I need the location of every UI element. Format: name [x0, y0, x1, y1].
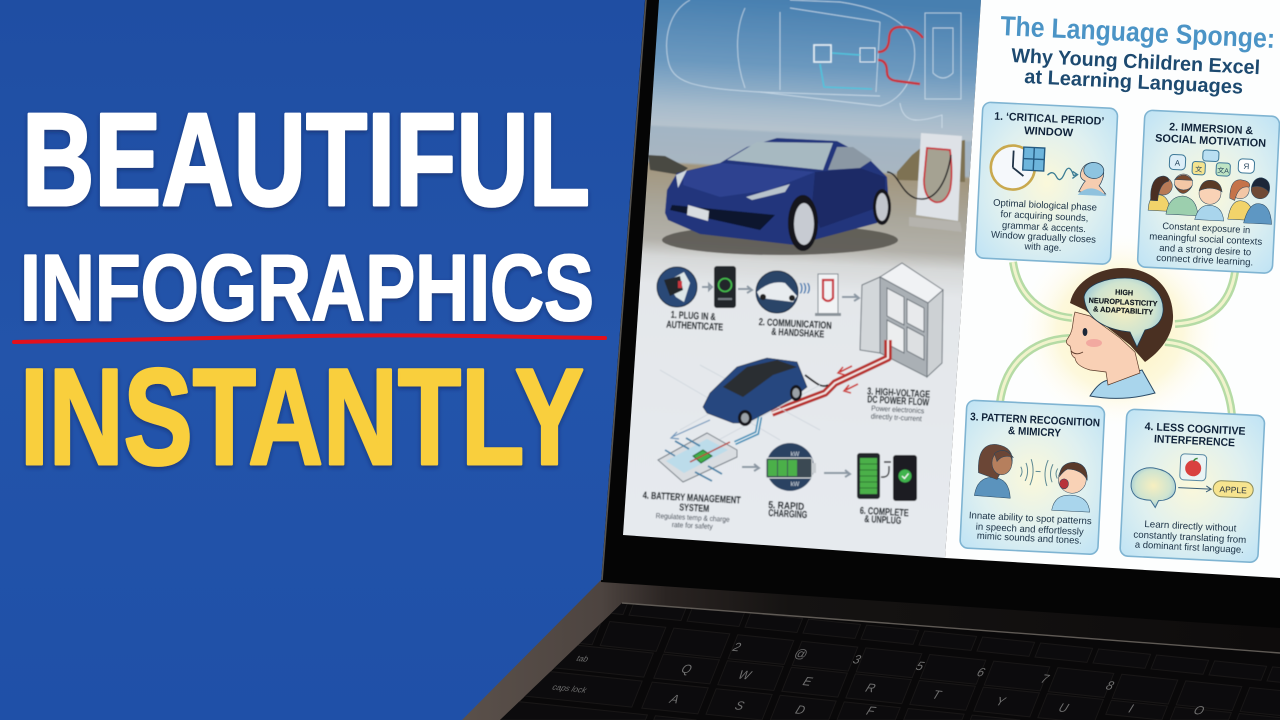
direction arrow: [671, 420, 710, 439]
card 1: critical period window: [975, 102, 1118, 264]
card 2 body text: Constant exposure in: [1162, 221, 1250, 236]
charger red U: [924, 148, 952, 202]
iso car glass roof: [723, 360, 797, 397]
power cable to car: [805, 375, 828, 386]
boy smile: [1071, 351, 1083, 354]
icon: clock: [990, 144, 1036, 191]
keyboard: 5: [914, 659, 926, 673]
card 1 body text: with age.: [1023, 241, 1062, 254]
step 4 icon: battery pack: [658, 433, 737, 482]
step 1 label: [666, 310, 724, 334]
boy cheek: [1086, 339, 1102, 347]
icon: speech bubbles: Я: [1243, 162, 1250, 171]
panel: The Language Sponge infographic: [945, 0, 1280, 578]
car left headlight: [676, 170, 687, 188]
icon: mother speaking: [974, 444, 1014, 498]
arrow: [742, 464, 759, 471]
right hill: [897, 140, 965, 182]
step 4 label: SYSTEM: [679, 502, 709, 515]
card 1 body text: grammar & accents.: [1002, 220, 1086, 235]
keyboard: tab: [575, 653, 590, 664]
card 2 body text: meaningful social contexts: [1149, 231, 1263, 248]
card 2 heading: SOCIAL MOTIVATION: [1155, 133, 1266, 150]
front wheel: [788, 195, 818, 251]
step 2 icon: car circle: [756, 271, 798, 313]
keyboard: esc: [528, 591, 552, 607]
icon: speech bubbles: 文: [1195, 165, 1202, 174]
step 3: high-voltage DC lines: [772, 340, 888, 413]
card 4 body text: a dominant first language.: [1135, 540, 1244, 556]
card 4 body text: constantly translating from: [1133, 529, 1246, 546]
step 2 icon: charger: [815, 274, 841, 316]
headline word: INFOGRAPHICS: INFOGRAPHICS: [20, 235, 594, 340]
brain: NEUROPLASTICITY: [1088, 296, 1158, 308]
central glow: [1015, 230, 1225, 430]
keyboard top edge highlight: [622, 603, 1280, 653]
step 5 icon: rapid charging battery: kW: [791, 452, 800, 458]
step 6 icon: check phone: [893, 455, 917, 501]
card 2 body text: [1148, 220, 1263, 269]
white page: [945, 0, 1280, 578]
card 3: pattern recognition and mimicry: [960, 400, 1105, 555]
brain: & ADAPTABILITY: [1093, 304, 1153, 317]
panel: EV charging infographic: [623, 0, 981, 558]
boy face: [1066, 312, 1140, 385]
step 6 label: 6. COMPLETE: [859, 506, 909, 519]
car body: [665, 138, 889, 245]
keyboard: 6: [975, 665, 987, 679]
keyboard: Q: [679, 662, 694, 676]
card 4 heading: [1144, 421, 1246, 450]
card 3 body text: mimic sounds and tones.: [977, 531, 1082, 547]
cable between phones: [881, 462, 891, 477]
icon: wavy arrow: [1047, 167, 1078, 180]
step 3 label: directly tr-current: [871, 412, 923, 423]
card 2 heading: [1155, 121, 1267, 150]
car side windows: [828, 147, 872, 170]
step 5 label: CHARGING: [768, 508, 808, 521]
bezel edge highlight: [602, 0, 646, 580]
step 1 icon: connector circle: [657, 267, 697, 307]
keyboard: E: [801, 674, 815, 689]
boy shirt: [1090, 370, 1155, 398]
headline word: INSTANTLY: INSTANTLY: [20, 341, 584, 494]
person 2: [1166, 173, 1200, 216]
card 4 heading: 4. LESS COGNITIVE: [1144, 421, 1246, 438]
blueprint connector box: [860, 48, 875, 62]
step 5 label: [768, 500, 808, 521]
coolant line highlight: [735, 417, 760, 443]
step labels: [641, 310, 931, 532]
step 5 label: 5. RAPID: [768, 500, 804, 513]
keyboard: U: [1057, 701, 1071, 715]
red underline: [14, 335, 605, 342]
blueprint car and charger: [667, 0, 961, 128]
card 3 heading: [969, 411, 1100, 442]
charger post: [916, 133, 962, 221]
connector: card 4 to head: [1165, 342, 1232, 415]
card 1 body text: for acquiring sounds,: [1000, 209, 1089, 224]
arrow: [824, 470, 850, 477]
step 2 icon: signal waves: ))): [800, 282, 811, 294]
iso rear wheel: [790, 385, 802, 401]
keyboard: 2: [730, 640, 743, 654]
step 5 icon: rapid charging battery: [766, 443, 816, 491]
laptop screen bezel: [601, 0, 1280, 628]
card 3 body text: Innate ability to spot patterns: [969, 510, 1092, 527]
card 2 body text: connect drive learning.: [1156, 253, 1253, 268]
headline word: BEAUTIFUL: BEAUTIFUL: [22, 86, 590, 233]
icon: speech bubbles: [1169, 148, 1255, 177]
card 1 body text: Window gradually closes: [991, 230, 1096, 246]
APPLE word pill: APPLE: [1219, 484, 1247, 495]
step 2 label: & HANDSHAKE: [771, 327, 825, 340]
card 1 body text: [990, 198, 1098, 256]
blueprint red power lines: [878, 27, 923, 84]
icon: group of people: [1148, 172, 1274, 224]
card 3 body text: [968, 510, 1092, 547]
person 3 child: [1195, 180, 1226, 221]
keyboard: O: [1192, 703, 1207, 718]
step 3 icon: power cabinet: [860, 263, 943, 377]
keyboard: W: [736, 668, 754, 683]
step 2 label: [758, 317, 832, 341]
keyboard: I: [1127, 702, 1136, 716]
keyboard: R: [864, 681, 878, 695]
step 3 label: 3. HIGH-VOLTAGE: [867, 386, 931, 401]
keyboard: [500, 603, 1280, 720]
icon: child mimicking: [1052, 461, 1092, 512]
card 4 heading: INTERFERENCE: [1154, 433, 1235, 449]
card 4 body text: Learn directly without: [1144, 519, 1237, 534]
car headlight: [746, 184, 790, 200]
laptop keyboard deck: [462, 580, 1280, 720]
blueprint chip: [814, 45, 831, 62]
icon: speech bubbles: 文A: [1217, 166, 1230, 175]
card 1 heading: [993, 111, 1104, 141]
step 4 label: [641, 490, 741, 532]
step 2 label: 2. COMMUNICATION: [758, 317, 832, 332]
APPLE word pill: [1213, 480, 1254, 498]
keyboard: 3: [851, 653, 863, 667]
step 4 label: Regulates temp & charge: [656, 511, 730, 524]
step 1 icon: phone: [714, 266, 736, 308]
connector tubes: [1000, 262, 1235, 415]
iso front wheel: [738, 410, 752, 426]
keyboard: S: [733, 699, 747, 713]
person 4: [1228, 179, 1256, 220]
person 5: [1244, 177, 1274, 224]
arrow to word: [1178, 485, 1211, 492]
charging cable: [887, 155, 951, 199]
step 4 label: 4. BATTERY MANAGEMENT: [642, 490, 741, 507]
keyboard: @: [792, 647, 810, 661]
iso car body: [703, 358, 807, 423]
subtitle line 2: at Learning Languages: [1024, 66, 1244, 99]
card 1 heading: WINDOW: [1024, 125, 1074, 139]
car hood: [683, 163, 815, 197]
left rock: [648, 155, 688, 175]
connector: card 1 to head: [1013, 262, 1072, 318]
step 4 label: rate for safety: [672, 520, 713, 531]
step 3 label: Power electronics: [871, 404, 925, 415]
car door panel: [812, 168, 885, 228]
card 3 heading: & MIMICRY: [1008, 425, 1062, 440]
isometric grid: [660, 365, 820, 450]
icon: speech bubbles: A: [1175, 159, 1181, 168]
icon: apple speech bubble: [1180, 454, 1207, 481]
person 1: [1148, 175, 1173, 211]
card 4 body text: [1133, 518, 1247, 556]
subtitle line 1: Why Young Children Excel: [1011, 45, 1261, 79]
card 4: less cognitive interference: [1120, 409, 1265, 563]
arrow: [738, 286, 752, 293]
keyboard: A: [667, 692, 681, 706]
icon: brain: [1130, 467, 1176, 508]
card 3 body text: in speech and effortlessly: [976, 522, 1084, 538]
step 3: isometric blue car: [703, 358, 807, 426]
card 2: immersion and social motivation: [1137, 110, 1280, 273]
arrow: [842, 294, 859, 301]
brain: [1084, 278, 1163, 347]
step 6 label: [859, 506, 909, 527]
car windshield: [727, 142, 833, 170]
car ground shadow: [662, 225, 898, 255]
central boy head: [1066, 268, 1173, 398]
card 1 body text: Optimal biological phase: [993, 198, 1097, 214]
brain label: HIGH: [1115, 288, 1133, 297]
step 6 label: & UNPLUG: [864, 514, 902, 527]
charger base: [909, 217, 962, 232]
scene background: [623, 0, 981, 558]
coolant lines: [735, 417, 760, 443]
keyboard: F: [864, 704, 878, 718]
headline: [20, 86, 594, 494]
blueprint cyan data lines: [820, 53, 872, 89]
keyboard: 8: [1104, 679, 1116, 693]
keyboard: 7: [1039, 672, 1052, 686]
step 1 label: 1. PLUG IN &: [670, 310, 716, 323]
arrow: [702, 284, 712, 290]
icon: window: [1023, 147, 1045, 171]
connector: card 3 to head: [1000, 338, 1070, 402]
hair: [1070, 268, 1173, 362]
step 3 label: DC POWER FLOW: [867, 394, 930, 409]
icon: head with brain: [1078, 162, 1108, 196]
photo: supercharger: [887, 133, 962, 232]
car licence plate: [687, 205, 709, 221]
laptop: [462, 0, 1280, 720]
car grille: [670, 205, 775, 230]
card 3 heading: 3. PATTERN RECOGNITION: [970, 411, 1100, 430]
card 2 body text: and a strong desire to: [1159, 243, 1251, 258]
keyboard: caps lock: [551, 682, 589, 695]
keyboard: Y: [994, 694, 1009, 709]
DC flow arrows: [838, 366, 858, 393]
boy eye: [1083, 328, 1087, 336]
card 1 heading: 1. ‘CRITICAL PERIOD’: [994, 111, 1104, 128]
rear wheel: [873, 189, 891, 225]
card 2 heading: 2. IMMERSION &: [1169, 121, 1253, 137]
step 5 icon: rapid charging battery: kW: [791, 482, 800, 488]
icon: sound waves: [1020, 459, 1058, 486]
keyboard: D: [793, 703, 807, 717]
step 6 icon: charged phone: [857, 453, 880, 499]
step 1 label: AUTHENTICATE: [666, 320, 724, 334]
keyboard: T: [930, 688, 944, 702]
step 3 label: [866, 386, 931, 424]
connector: card 2 to head: [1175, 272, 1235, 324]
photo: blue car: [665, 138, 891, 251]
